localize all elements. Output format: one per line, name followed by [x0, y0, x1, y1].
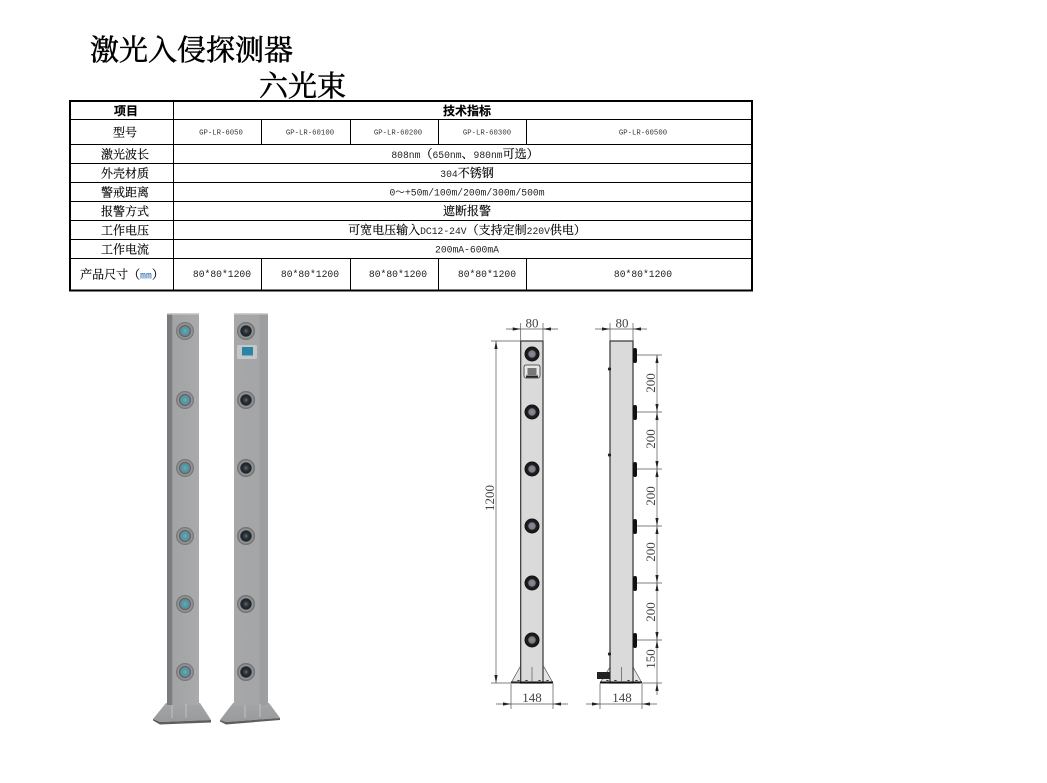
technical drawing: side view	[597, 341, 642, 683]
row: model: GP-LR-60200	[374, 130, 422, 138]
dimension labels: spacing 200 and 150: 200	[643, 429, 658, 449]
dimension label: base 148: 148	[612, 690, 632, 705]
dimension labels: spacing 200 and 150: 200	[643, 542, 658, 562]
icon: display module	[524, 365, 540, 378]
row: model: GP-LR-6050	[199, 130, 243, 138]
title	[90, 34, 346, 103]
row: guard distance: 0～+50m/100m/200m/300m/500m	[389, 188, 545, 198]
row: working current: 工作电流	[101, 240, 149, 258]
specification table	[70, 101, 752, 291]
dimensions: front view	[482, 316, 568, 709]
table header row: 技术指标	[443, 102, 491, 119]
row: housing material: 外壳材质	[101, 164, 149, 182]
dimension labels: spacing 200 and 150: 150	[643, 649, 658, 669]
row: working voltage	[101, 221, 586, 238]
dimension label: base 148: 148	[522, 690, 542, 705]
row: working voltage: 可宽电压输入DC12-24V（支持定制220V供电）	[348, 221, 586, 238]
row: alarm method: 遮断报警	[443, 202, 491, 219]
dimension label: height 1200: 1200	[482, 485, 497, 511]
row: product size: 产品尺寸（mm）	[80, 266, 164, 282]
dimension label: width 80: 80	[616, 316, 628, 330]
dimensions: side view	[586, 316, 662, 709]
row: guard distance: 警戒距离	[101, 184, 149, 200]
dimension label: width 80: 80	[526, 316, 538, 330]
row: model	[113, 124, 667, 140]
icon: display panel	[237, 345, 257, 359]
technical drawing: front view	[511, 341, 553, 683]
product photo: emitter post	[153, 313, 211, 724]
row: laser wavelength: 激光波长	[101, 146, 149, 162]
row: working current	[101, 240, 499, 258]
row: working voltage: 工作电压	[101, 222, 149, 238]
row: model: GP-LR-60300	[463, 130, 511, 138]
row: product size: 80*80*1200	[193, 269, 251, 280]
title: 激光入侵探测器	[90, 34, 293, 67]
dimension labels: spacing 200 and 150: 200	[643, 486, 658, 506]
row: laser wavelength	[101, 145, 539, 162]
dimension labels: spacing 200 and 150	[643, 373, 658, 669]
row: model: 型号	[113, 124, 137, 140]
row: laser wavelength: 808nm（650nm、980nm可选）	[391, 145, 539, 162]
row: product size: 80*80*1200	[369, 269, 427, 280]
table header row: 项目	[114, 102, 138, 119]
row: working current: 200mA-600mA	[435, 244, 499, 256]
dimension labels: spacing 200 and 150: 200	[643, 373, 658, 393]
row: product size: 80*80*1200	[458, 269, 516, 280]
dimension labels: spacing 200 and 150: 200	[643, 602, 658, 622]
title: 六光束	[259, 70, 346, 103]
row: alarm method: 报警方式	[101, 202, 149, 220]
row: product size	[80, 266, 672, 282]
row: model: GP-LR-60100	[286, 130, 334, 138]
row: product size: 80*80*1200	[281, 269, 339, 280]
row: guard distance	[101, 184, 545, 200]
row: alarm method	[101, 202, 491, 220]
product photo: receiver post	[220, 313, 280, 724]
table header row	[114, 102, 491, 119]
row: housing material	[101, 164, 494, 182]
row: model: GP-LR-60500	[619, 130, 667, 138]
row: housing material: 304不锈钢	[440, 164, 494, 181]
row: product size: 80*80*1200	[614, 269, 672, 280]
